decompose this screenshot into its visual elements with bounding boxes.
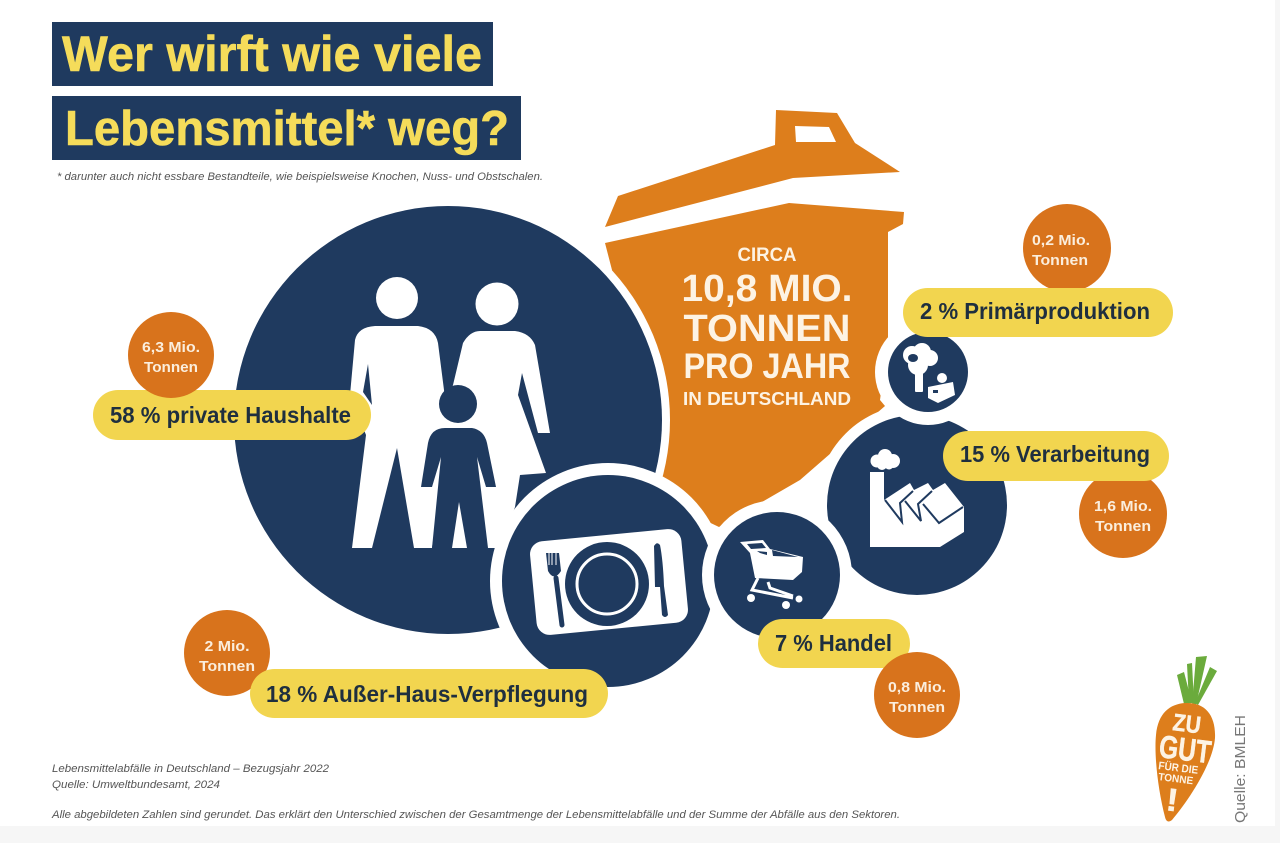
title: Lebensmittel* weg? — [65, 102, 509, 156]
callout: primary production — [903, 204, 1173, 337]
icon: factory — [870, 449, 964, 547]
footnote: definition: * darunter auch nicht essbare Bestandteile, wie beispielsweise Knochen, Nuss- und Obstschalen. — [57, 171, 543, 183]
icon: orange bin with total: IN DEUTSCHLAND — [683, 389, 851, 409]
source notes: Quelle: Umweltbundesamt, 2024 — [52, 779, 220, 791]
panel: retail circle — [702, 500, 852, 650]
callout: processing: 15 % Verarbeitung — [960, 441, 1150, 467]
icon: shopping cart — [740, 540, 803, 609]
icon: carrot logo — [1155, 656, 1217, 821]
panel: primary production circle — [875, 319, 981, 425]
source notes: Alle abgebildeten Zahlen sind gerundet. Das erklärt den Unterschied zwischen der Gesamtmenge der Lebensmittelabfälle und der Summe der Abfälle aus den Sektoren. — [51, 809, 900, 821]
icon: carrot logo: GUT — [1157, 728, 1213, 770]
source notes — [51, 763, 900, 821]
callout: private households — [93, 312, 371, 440]
title — [52, 22, 521, 160]
callout: primary production: 2 % Primärproduktion — [920, 298, 1150, 324]
callout: processing: 1,6 Mio. — [1094, 498, 1152, 515]
icon: orange bin with total: PRO JAHR — [684, 347, 850, 386]
callout: private households: 58 % private Haushalte — [110, 402, 351, 428]
callout: private households: Tonnen — [144, 359, 198, 376]
callout: food service: Tonnen — [199, 658, 255, 675]
source credit: vertical: Quelle: BMLEH — [1232, 715, 1249, 823]
icon: orange bin with total: 10,8 MIO. — [682, 268, 852, 310]
icon: family — [350, 277, 550, 548]
callout: retail: 7 % Handel — [775, 630, 892, 656]
callout: food service: 18 % Außer-Haus-Verpflegung — [266, 681, 588, 707]
callout: processing: Tonnen — [1095, 518, 1151, 535]
icon: orange bin with total: CIRCA — [738, 245, 797, 266]
icon: orange bin with total — [600, 110, 904, 527]
icon: carrot logo: ZU — [1171, 709, 1202, 739]
panel: food service circle — [490, 463, 726, 699]
panel: private households circle — [226, 198, 670, 642]
callout: food service: 2 Mio. — [204, 638, 250, 655]
callout: food service — [184, 610, 608, 718]
callout: primary production: 0,2 Mio. — [1032, 232, 1090, 249]
icon: tree and box — [903, 343, 955, 403]
icon: carrot logo: ! — [1164, 781, 1180, 818]
icon: orange bin with total: TONNEN — [684, 308, 850, 350]
icon: place setting — [529, 528, 689, 636]
callout: retail: 0,8 Mio. — [888, 679, 946, 696]
callout: retail: Tonnen — [889, 699, 945, 716]
source notes: Lebensmittelabfälle in Deutschland – Bezugsjahr 2022 — [52, 763, 329, 775]
callout: primary production: Tonnen — [1032, 252, 1088, 269]
title: Wer wirft wie viele — [62, 26, 482, 82]
icon: carrot logo: TONNE — [1158, 771, 1194, 787]
panel: factory circle — [816, 404, 1018, 606]
icon: carrot logo: FÜR DIE — [1158, 759, 1199, 777]
callout: processing — [943, 431, 1169, 558]
callout: retail — [758, 619, 960, 738]
callout: private households: 6,3 Mio. — [142, 339, 200, 356]
